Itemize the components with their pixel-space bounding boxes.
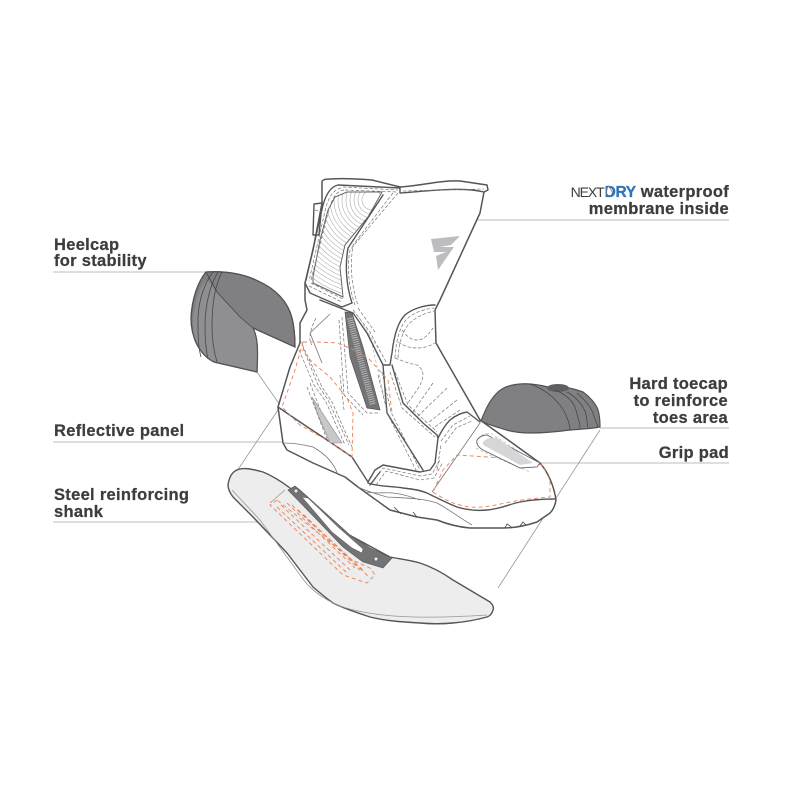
shank stitching — [270, 500, 375, 583]
logo: nextdry: NEXTDRY waterproof — [571, 183, 729, 201]
membrane panel — [312, 192, 383, 298]
steel shank — [288, 486, 392, 568]
label: toecap 1: Hard toecap — [629, 375, 728, 393]
shaft strap and stitching — [305, 185, 484, 307]
grip pad — [477, 435, 540, 468]
midsole lines — [358, 483, 555, 528]
label: stability: for stability — [54, 252, 147, 270]
brand logo — [431, 236, 460, 270]
insole with steel shank — [228, 469, 493, 624]
label: shank 1: Steel reinforcing — [54, 486, 189, 504]
label: toecap 3: toes area — [653, 409, 729, 427]
orange reinforcement lines — [282, 342, 550, 507]
heel stitching — [278, 314, 368, 482]
reflective panel — [312, 397, 342, 443]
boot — [277, 178, 557, 529]
insole — [228, 469, 493, 624]
heelcap — [191, 272, 295, 372]
toecap — [481, 384, 600, 433]
label: shank 2: shank — [54, 503, 104, 521]
boot outline — [278, 179, 556, 528]
ankle pull tab — [313, 203, 322, 235]
label: heelcap: Heelcap — [54, 236, 119, 254]
icon: droplet — [607, 186, 612, 196]
tongue stitching — [395, 328, 460, 428]
label: membrane: membrane inside — [589, 200, 729, 218]
instep strap — [320, 300, 443, 485]
label: reflective panel: Reflective panel — [54, 422, 184, 440]
label: grip pad: Grip pad — [659, 444, 729, 462]
leader lines — [53, 220, 729, 588]
label: toecap 2: to reinforce — [634, 392, 728, 410]
side zipper — [339, 312, 380, 415]
forefoot panel — [432, 412, 540, 492]
